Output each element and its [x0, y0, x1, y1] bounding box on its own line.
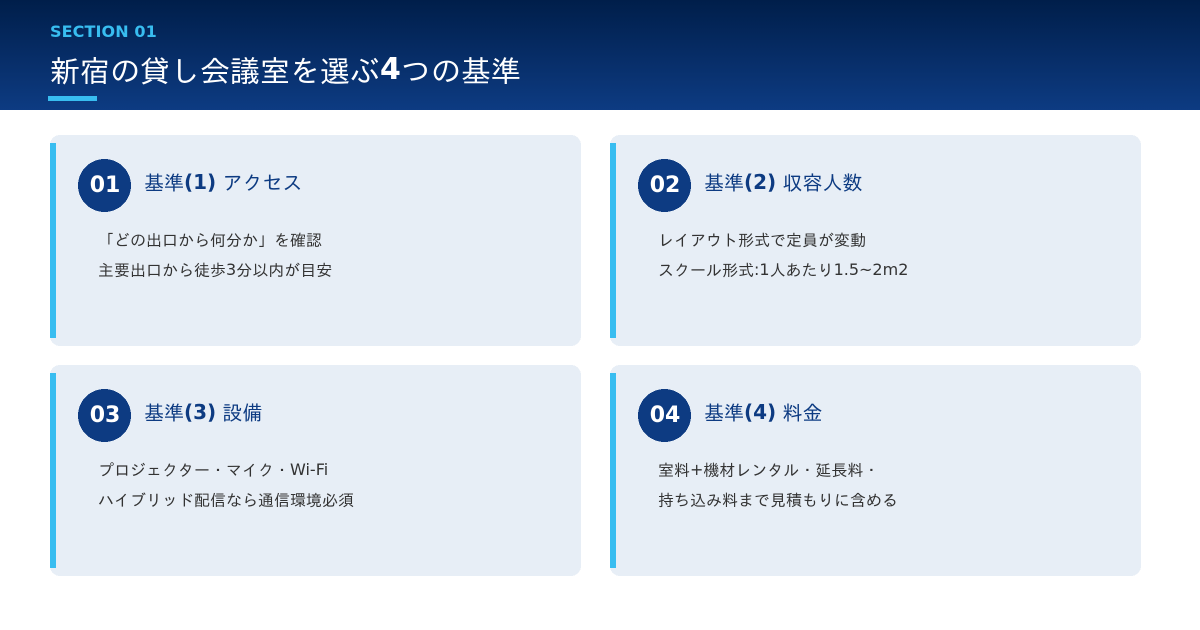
heading: 基準	[144, 171, 184, 195]
body text	[98, 231, 332, 280]
heading: 基準	[144, 401, 184, 425]
accent bar	[50, 373, 56, 568]
body text: 持ち込み料まで見積もりに含める	[658, 491, 898, 510]
body text: 室料	[658, 461, 690, 480]
panel: criterion 1 access	[50, 135, 581, 346]
body text	[658, 231, 908, 280]
panel: criterion 2 capacity	[610, 135, 1141, 346]
heading: (4)	[744, 400, 776, 424]
body text: ハイブリッド配信なら通信環境必須	[98, 491, 354, 510]
section label: SECTION 01	[50, 22, 157, 41]
title: 新宿の貸し会議室を選ぶ	[50, 55, 380, 90]
body text: 「どの出口から何分か」を確認	[98, 231, 322, 250]
title: つの基準	[401, 55, 521, 90]
panel: criterion 3 equipment	[50, 365, 581, 576]
body text: 1.5~2m2	[834, 260, 908, 279]
number badge 03	[78, 389, 131, 442]
number badge 02	[638, 159, 691, 212]
accent bar	[50, 143, 56, 338]
body text: 3	[226, 260, 236, 279]
number badge 04: 04	[650, 403, 680, 428]
header band	[0, 0, 1200, 110]
number badge 01: 01	[90, 173, 120, 198]
heading: 収容人数	[776, 171, 863, 195]
heading: アクセス	[216, 171, 303, 195]
body text: Wi-Fi	[290, 460, 328, 479]
heading: 基準	[704, 171, 744, 195]
heading: (3)	[184, 400, 216, 424]
body text: 主要出口から徒歩	[98, 261, 226, 280]
number badge 01	[78, 159, 131, 212]
body text: プロジェクター・マイク・	[98, 461, 290, 480]
body text: 機材レンタル・延長料・	[703, 461, 879, 480]
body text: :1	[754, 260, 770, 279]
heading: 基準	[704, 401, 744, 425]
number badge 02: 02	[650, 173, 680, 198]
body text: スクール形式	[658, 261, 754, 280]
number badge 04	[638, 389, 691, 442]
accent bar	[610, 373, 616, 568]
heading: (1)	[184, 170, 216, 194]
body text: レイアウト形式で定員が変動	[658, 231, 866, 250]
title: 4	[380, 52, 401, 87]
heading: (2)	[744, 170, 776, 194]
title underline	[48, 96, 97, 101]
body text	[98, 460, 354, 510]
heading: 料金	[776, 401, 823, 425]
body text: 分以内が目安	[236, 261, 332, 280]
body text: +	[690, 460, 703, 479]
body text: 人あたり	[770, 261, 834, 280]
heading: 設備	[216, 401, 263, 425]
panel: criterion 4 price	[610, 365, 1141, 576]
accent bar	[610, 143, 616, 338]
number badge 03: 03	[90, 403, 120, 428]
body text	[658, 460, 898, 510]
